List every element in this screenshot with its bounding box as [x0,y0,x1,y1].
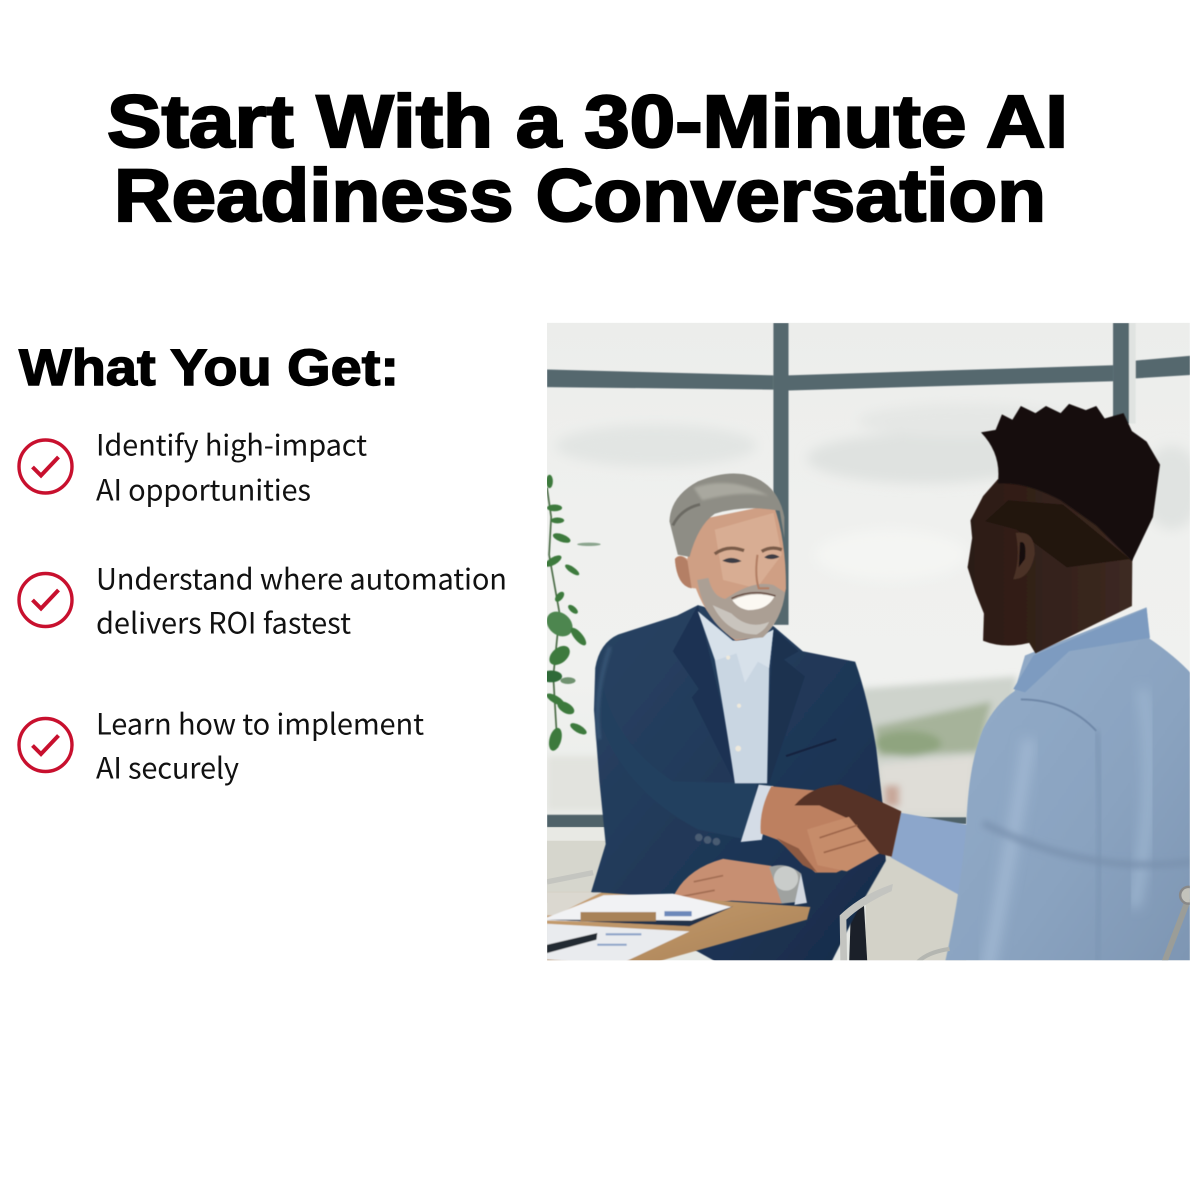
benefit list [19,422,507,788]
icon: check circle 1 [19,440,72,493]
benefit text 3: Learn how to implement [96,702,424,744]
title [107,80,1068,237]
window background [547,320,1200,974]
chair right of man left [840,884,893,960]
man left: dress shirt [698,611,773,842]
heading: What You Get: What You Get: [19,339,399,396]
man left: head [669,473,786,641]
table with papers [547,892,811,960]
chair behind man left [547,873,868,970]
benefit text 2: Understand where automation [96,556,507,598]
man left: suit [591,605,886,970]
title: Readiness Conversation [114,154,1046,237]
icon: check circle 3 [19,718,72,772]
benefit text 3: AI securely [96,746,239,788]
benefit text 2 [96,556,507,642]
man right: sleeve [891,813,970,897]
man right: shirt [943,607,1197,970]
handshake [761,785,901,873]
clipboard [547,894,731,925]
benefit text 2: delivers ROI fastest [96,600,351,642]
paper sheet [547,924,690,965]
man right: hair [981,404,1160,561]
man left: resting hand and watch [673,859,807,907]
wall [547,824,966,975]
benefit text 3 [96,702,424,788]
title: Start With a 30-Minute AI [107,80,1068,163]
chair behind man right [916,886,1190,960]
icon: check circle 2 [19,574,72,626]
benefit text 1: AI opportunities [96,468,311,510]
window frame [547,323,1197,827]
man right: head and neck [968,479,1132,653]
benefit text 1 [96,422,367,510]
benefit 1 [19,422,367,510]
plant [547,474,601,752]
benefit text 1: Identify high-impact [96,422,367,464]
benefit 3 [19,702,424,788]
photo: two men shaking hands in an office [540,320,1200,975]
benefit 2 [19,556,507,642]
